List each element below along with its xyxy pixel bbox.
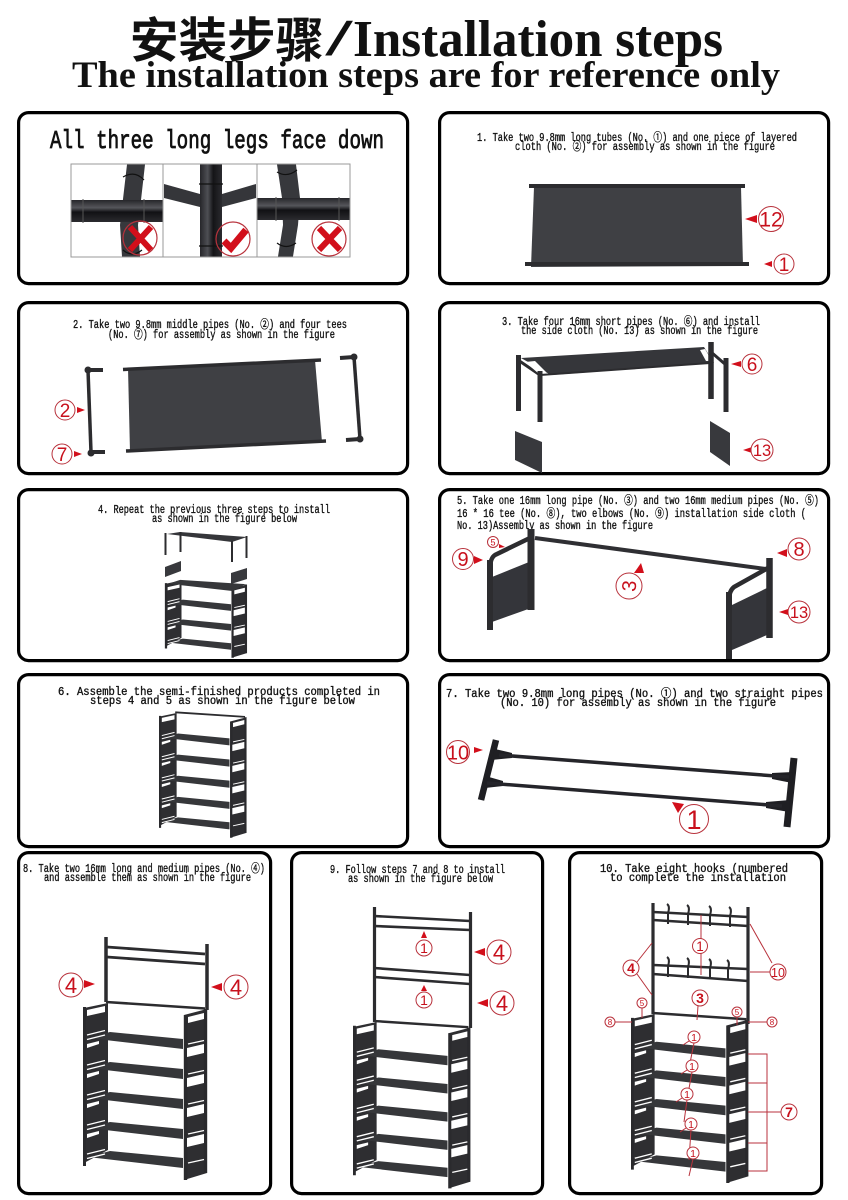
step 4 text bbox=[98, 504, 330, 526]
panel: step 7 bbox=[440, 675, 829, 847]
callout 4: 4 bbox=[627, 960, 635, 976]
step 10 text bbox=[600, 863, 788, 885]
callout 5: 5 bbox=[490, 538, 496, 548]
step 7 text: 7. Take two 9.8mm long pipes (No. ①) and two straight pipes bbox=[446, 687, 823, 701]
callout 1 top: 1 bbox=[696, 939, 704, 954]
panel: step 4 bbox=[19, 490, 408, 661]
callout 7 bbox=[52, 444, 82, 466]
title: 安装步骤 bbox=[130, 1, 324, 71]
callout 12: 12 bbox=[759, 208, 783, 232]
shelf with four legs bbox=[518, 342, 726, 422]
callout 12 bbox=[745, 206, 784, 232]
callout 5 left bbox=[637, 998, 647, 1008]
callout 10: 10 bbox=[771, 966, 785, 980]
step 6 text: 6. Assemble the semi-finished products completed in bbox=[58, 686, 380, 699]
callout 1 bbox=[672, 802, 708, 835]
step 1 text bbox=[477, 131, 797, 154]
step 7 text bbox=[446, 687, 823, 710]
five-tier rack bbox=[160, 712, 246, 838]
step 4 text: 4. Repeat the previous three steps to install bbox=[98, 504, 330, 517]
callout 6: 6 bbox=[747, 355, 757, 376]
step 10 text: 10. Take eight hooks (numbered bbox=[600, 863, 788, 876]
callout 3: 3 bbox=[696, 990, 704, 1006]
callout 9 bbox=[452, 548, 483, 571]
step 5 text bbox=[457, 494, 819, 533]
rack with two rail sets bbox=[354, 907, 470, 1188]
callout 8 left: 8 bbox=[608, 1018, 613, 1027]
subtitle: The installation steps are for reference only bbox=[72, 55, 781, 96]
step 3 text: the side cloth (No. 13) as shown in the figure bbox=[521, 325, 758, 338]
callout 8 right: 8 bbox=[770, 1018, 775, 1027]
rack with medium pipes bbox=[84, 937, 207, 1180]
step 9 text: as shown in the figure below bbox=[348, 873, 493, 886]
callout 4 left bbox=[59, 973, 95, 998]
step 2 text: (No. ⑦) for assembly as shown in the figure bbox=[108, 328, 335, 342]
panel: step 2 bbox=[19, 303, 408, 474]
callout 4 left: 4 bbox=[65, 973, 77, 998]
callout 10: 10 bbox=[447, 742, 469, 764]
left middle pipe with tees bbox=[85, 367, 105, 456]
step 2 text bbox=[73, 318, 347, 342]
callout 1 lower bbox=[416, 985, 432, 1008]
callout 4 lower bbox=[477, 991, 514, 1016]
callout 10 bbox=[446, 740, 483, 764]
step 4 text: as shown in the figure below bbox=[152, 513, 297, 526]
upper tier frame bbox=[166, 532, 247, 562]
shelf callouts 1: 1 bbox=[689, 1061, 695, 1073]
callout 4 lower: 4 bbox=[496, 991, 508, 1016]
title bbox=[130, 1, 723, 71]
callout 7: 7 bbox=[57, 445, 67, 466]
callout 13: 13 bbox=[753, 442, 771, 460]
right side cloth piece bbox=[231, 568, 247, 584]
left side assembly bbox=[490, 529, 534, 630]
callout 6 bbox=[731, 354, 762, 376]
callout 8 right bbox=[767, 1017, 777, 1027]
leader lines bbox=[615, 915, 781, 1176]
layered cloth with tubes bbox=[525, 184, 749, 267]
panel: all three long legs face down bbox=[19, 113, 408, 284]
left side cloth bbox=[515, 431, 542, 473]
step 7 text: (No. 10) for assembly as shown in the figure bbox=[500, 697, 776, 710]
callout 2: 2 bbox=[60, 401, 70, 422]
right side cloth bbox=[710, 421, 730, 466]
layered cloth tilted bbox=[123, 360, 326, 452]
step 2 text: 2. Take two 9.8mm middle pipes (No. ②) and four tees bbox=[73, 318, 347, 332]
step 8 text bbox=[23, 862, 265, 885]
callout 1: 1 bbox=[779, 255, 789, 276]
callout 13 bbox=[743, 439, 773, 461]
panel: step 1 bbox=[440, 113, 829, 284]
callout 13 bbox=[779, 601, 810, 623]
step 1 text: cloth (No. ②) for assembly as shown in the figure bbox=[515, 140, 775, 154]
right side assembly bbox=[729, 558, 770, 659]
callout 1 upper: 1 bbox=[420, 940, 428, 956]
shelf callouts 1: 1 bbox=[684, 1089, 690, 1101]
shelf callouts 1: 1 bbox=[691, 1032, 697, 1044]
step 6 text bbox=[58, 686, 380, 708]
callout 8: 8 bbox=[793, 539, 805, 561]
panel: step 6 bbox=[19, 675, 408, 847]
callout 4 right bbox=[211, 975, 248, 1000]
callout 1: 1 bbox=[686, 805, 702, 835]
shelf callouts 1: 1 bbox=[690, 1148, 696, 1160]
callout 2 bbox=[55, 400, 85, 422]
left side cloth piece bbox=[165, 561, 181, 577]
step 3 text: 3. Take four 16mm short pipes (No. ⑥) and install bbox=[502, 315, 760, 329]
callout 4 upper bbox=[474, 940, 511, 965]
shelf callouts 1: 1 bbox=[688, 1119, 694, 1131]
lower assembled shelves bbox=[166, 580, 247, 658]
callout 7 bbox=[781, 1104, 797, 1120]
callout 4 upper: 4 bbox=[493, 940, 505, 965]
callout 1 bbox=[764, 254, 794, 276]
callout 13: 13 bbox=[790, 604, 808, 622]
long pipes with straight tees bbox=[481, 740, 794, 827]
long pipe bbox=[535, 538, 766, 569]
callout 8 bbox=[777, 538, 810, 561]
callout 5 right: 5 bbox=[735, 1008, 740, 1017]
photo: wrong orientation right bbox=[257, 164, 350, 257]
callout 5 bbox=[488, 536, 505, 548]
callout 3 bbox=[616, 563, 644, 599]
shelf callouts 1 bbox=[681, 1031, 700, 1160]
step 9 text bbox=[330, 864, 505, 886]
callout 8 left bbox=[605, 1017, 615, 1027]
step 8 text: and assemble them as shown in the figure bbox=[44, 872, 251, 885]
title: / bbox=[324, 10, 353, 67]
right middle pipe with tees bbox=[340, 354, 363, 442]
callout 3 bbox=[692, 990, 708, 1006]
step 6 text: steps 4 and 5 as shown in the figure below bbox=[90, 695, 355, 708]
callout 1 lower: 1 bbox=[420, 992, 428, 1008]
callout 9: 9 bbox=[457, 549, 469, 571]
panel: step 3 bbox=[440, 303, 829, 474]
callout 3: 3 bbox=[619, 580, 641, 593]
callout 1 top bbox=[692, 938, 708, 954]
step 8 text: 8. Take two 16mm long and medium pipes (No. ④) bbox=[23, 862, 265, 876]
panel: step 9 bbox=[292, 853, 543, 1194]
step 9 text: 9. Follow steps 7 and 8 to install bbox=[330, 864, 505, 877]
step 3 text bbox=[502, 315, 760, 338]
panel: step 10 bbox=[570, 853, 822, 1194]
callout 4 right: 4 bbox=[230, 975, 242, 1000]
callout 4 bbox=[623, 960, 639, 976]
step 5 text: No. 13)Assembly as shown in the figure bbox=[457, 520, 653, 533]
finished rack with hooks bbox=[632, 903, 748, 1183]
step 10 text: to complete the installation bbox=[610, 872, 786, 885]
photo: wrong orientation left bbox=[71, 164, 163, 257]
heading: all three long legs: All three long legs face down bbox=[50, 126, 384, 156]
panel: step 8 bbox=[19, 853, 271, 1194]
callout 5 left: 5 bbox=[640, 999, 645, 1008]
callout 7: 7 bbox=[785, 1104, 793, 1120]
photo: correct orientation bbox=[163, 164, 257, 257]
callout 5 right bbox=[732, 1007, 742, 1017]
panel: step 5 bbox=[440, 490, 829, 661]
callout 1 upper bbox=[416, 931, 432, 956]
title: Installation steps bbox=[353, 11, 723, 68]
